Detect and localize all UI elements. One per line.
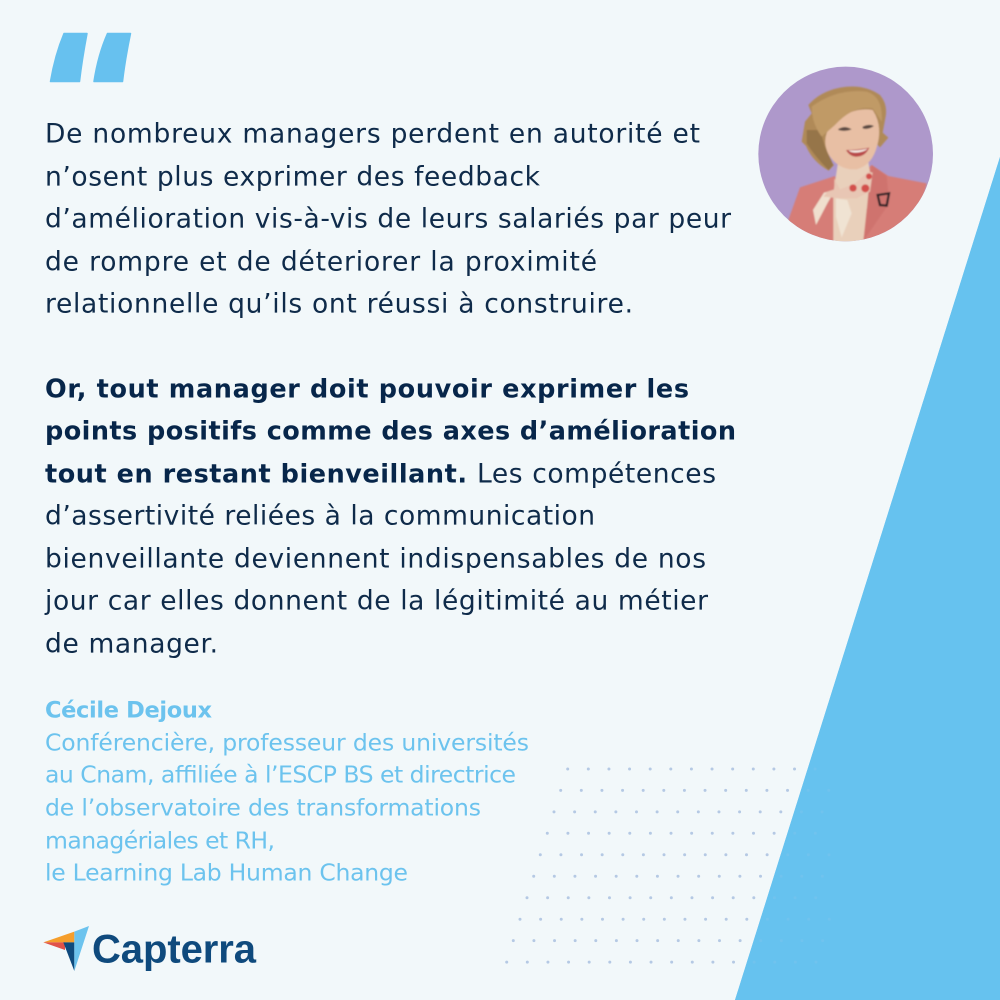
scarf tails <box>812 191 832 225</box>
quote paragraph 2: Or, tout manager doit pouvoir exprimer les <box>45 374 689 404</box>
dot pattern <box>507 769 830 962</box>
logo wordmark: Capterra <box>92 928 257 972</box>
quote paragraph 2: tout en restant bienveillant. <box>45 460 467 490</box>
quote paragraph 2: Les compétences <box>477 458 716 490</box>
quote paragraph 1: n’osent plus exprimer des feedback <box>45 162 541 192</box>
quote paragraph 1 <box>45 118 731 320</box>
quote paragraph 2: d’assertivité reliées à la communication <box>45 500 595 532</box>
quote paragraph 1: De nombreux managers perdent en autorité et <box>45 118 700 150</box>
author description: au Cnam, affiliée à l’ESCP BS et directrice <box>45 760 516 788</box>
author description: Conférencière, professeur des universités <box>45 728 529 756</box>
author description: le Learning Lab Human Change <box>45 858 408 886</box>
icon: quotation mark <box>50 34 130 82</box>
quote paragraph 1: d’amélioration vis-à-vis de leurs salariés par peur <box>45 204 731 234</box>
portrait background <box>758 67 933 241</box>
smile <box>846 148 869 157</box>
quote paragraph 1: relationnelle qu’ils ont réussi à construire. <box>45 288 633 320</box>
quote paragraph 2: points positifs comme des axes d’amélioration <box>45 416 736 446</box>
author description <box>45 728 529 886</box>
eyes <box>838 125 874 131</box>
author description: managériales et RH, <box>45 826 275 854</box>
portrait photo <box>758 67 933 247</box>
Capterra logo <box>43 926 257 972</box>
quote paragraph 2: de manager. <box>45 628 218 660</box>
hair fringe <box>812 91 882 137</box>
chest and blouse <box>833 160 872 247</box>
blue diagonal shape <box>735 157 1000 1000</box>
jacket <box>788 165 927 247</box>
hair <box>802 86 888 171</box>
quote paragraph 2: bienveillante deviennent indispensables de nos <box>45 544 706 574</box>
quote paragraph 1: de rompre et de déteriorer la proximité <box>45 246 597 278</box>
brooch <box>878 193 889 206</box>
face <box>825 109 879 169</box>
quote paragraph 2: jour car elles donnent de la légitimité au métier <box>44 586 708 616</box>
author description: de l’observatoire des transformations <box>45 794 481 822</box>
quote paragraph 2 <box>44 374 736 660</box>
author name: Cécile Dejoux <box>45 698 212 724</box>
scarf band <box>823 172 873 198</box>
logo mark <box>43 926 89 971</box>
right lapel <box>866 167 887 236</box>
